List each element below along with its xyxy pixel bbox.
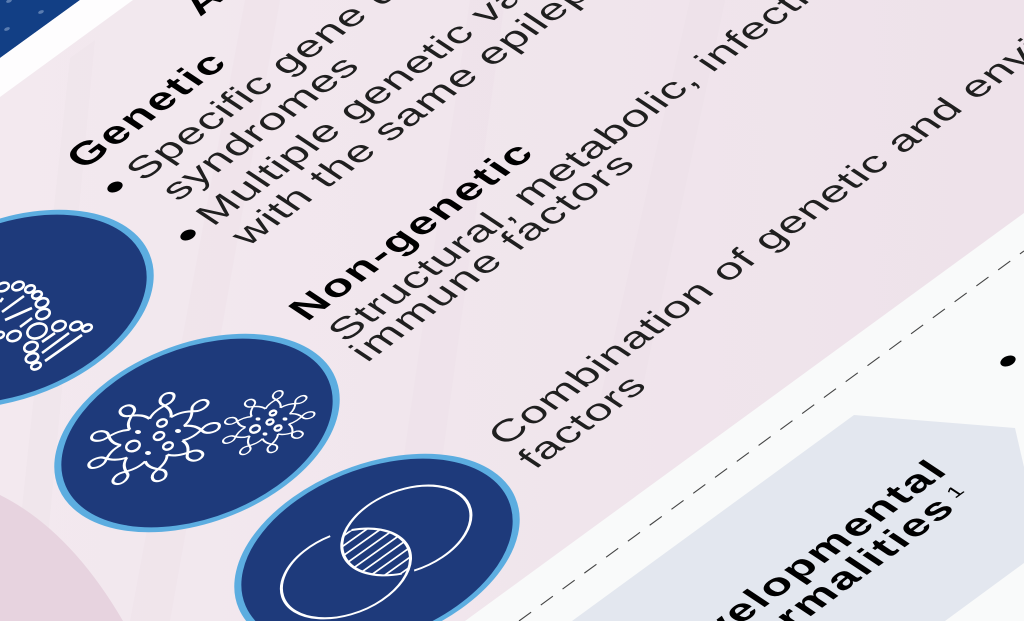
header dots: [4, 0, 44, 32]
text: immune factors: immune factors: [340, 146, 645, 367]
text: factors: factors: [508, 368, 655, 474]
bullet: [106, 179, 124, 195]
text: syndromes: syndromes: [151, 49, 368, 206]
white band: [0, 0, 133, 97]
bullet: [179, 227, 197, 243]
icon: venn circle: [234, 454, 520, 621]
icon: virus circle: [3, 299, 391, 567]
bullet: [999, 353, 1017, 369]
superscript: 1: [942, 483, 969, 501]
pink background circle: [0, 495, 123, 621]
corner header band: [0, 0, 80, 58]
dashed divider: [519, 251, 1024, 621]
heading: Genetic: Genetic: [56, 44, 237, 174]
panel stripes: [10, 0, 725, 621]
panel: developmental arrow: [572, 415, 1024, 621]
heading: Non-genetic: Non-genetic: [279, 135, 544, 326]
icon: genetic circle: [0, 175, 205, 443]
